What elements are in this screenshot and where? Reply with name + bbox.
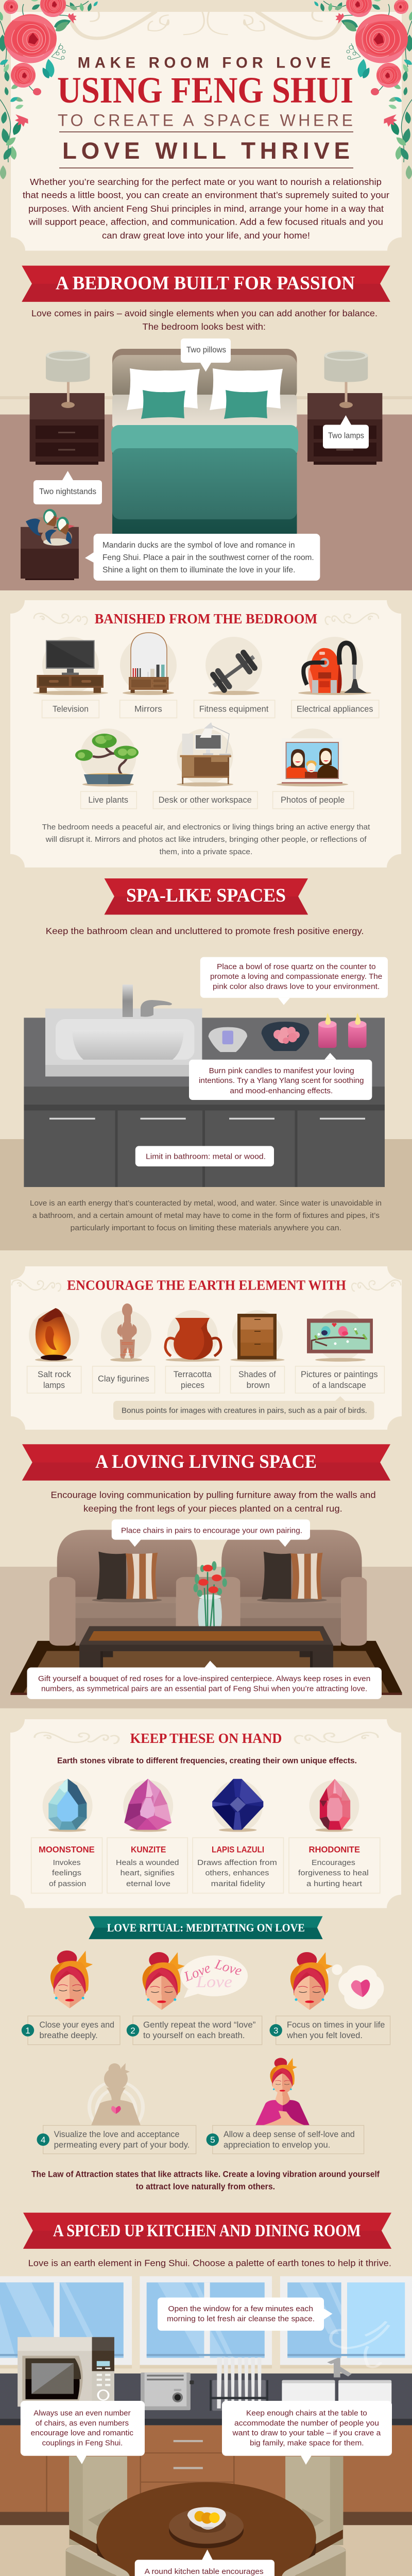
banner: a loving living space: A LOVING LIVING SPACE: [95, 1451, 317, 1472]
callout: enough chairs: Keep enough chairs at the table to: [246, 2409, 367, 2417]
card: lapis lazuli: Draws affection from: [197, 1858, 277, 1867]
step 5: 5: [210, 2135, 215, 2145]
icon: kunzite: [123, 1778, 173, 1832]
card: rhodonite: Encourages: [312, 1858, 355, 1867]
step 4: [37, 2125, 196, 2154]
callout: place chairs in pairs: [112, 1519, 310, 1547]
labels: row 1: [42, 700, 379, 718]
text: living intro: Encourage loving communication by pulling furniture away from the walls and: [50, 1490, 376, 1500]
icon: cushion left: [92, 1552, 162, 1602]
icon: moonstone: [43, 1778, 93, 1832]
illustration: kitchen and dining room: [0, 2276, 412, 2576]
text: living intro: keeping the front legs of your pieces planted on a central rug.: [83, 1503, 342, 1514]
icon: cushion right: [257, 1552, 327, 1602]
callout: two lamps: Two lamps: [328, 432, 364, 440]
icon: dining table: [96, 2482, 316, 2576]
text: kitchen intro: Love is an earth element in Feng Shui. Choose a palette of earth tones to help it thrive.: [28, 2258, 391, 2268]
callout: enough chairs: accommodate the number of people you: [234, 2419, 379, 2428]
labels: earth items: Terracotta: [174, 1370, 212, 1379]
card: lapis lazuli: [193, 1838, 283, 1893]
text: spa intro: Keep the bathroom clean and uncluttered to promote fresh positive energy.: [46, 926, 364, 936]
step 4: permeating every part of your body.: [54, 2140, 190, 2149]
callout: two nightstands: Two nightstands: [39, 487, 96, 496]
panel: encourage the earth element: [11, 1266, 402, 1430]
callout: two pillows: Two pillows: [186, 346, 226, 354]
title: TO CREATE A SPACE WHERE: [58, 111, 353, 130]
section: meditation steps: [22, 1951, 390, 2191]
callout: bonus points: Bonus points for images with creatures in pairs, such as a pair of birds.: [122, 1406, 367, 1415]
icon: lamp right: [324, 350, 368, 408]
text: script love: Love: [181, 1960, 213, 1985]
icon: front chair left: [66, 2545, 161, 2576]
callout: red roses: [27, 1661, 382, 1699]
callout: round table: A round kitchen table encourages: [145, 2568, 264, 2576]
title: MAKE ROOM FOR LOVE: [78, 55, 331, 72]
icon: desk: [177, 722, 233, 786]
text: earth energy: Love is an earth energy that’s counteracted by metal, wood, and water. Since water is unavoidable in: [30, 1199, 382, 1208]
text: banished explanation: them, into a private space.: [160, 848, 252, 856]
card: kunzite: eternal love: [126, 1879, 170, 1888]
icon: bowl of rose quartz: [262, 1022, 309, 1051]
callout: even number of chairs: [21, 2401, 145, 2464]
icon: mandarin ducks: [26, 509, 75, 546]
labels: row 1: Television: [53, 704, 89, 714]
step 5: appreciation to envelop you.: [224, 2140, 330, 2149]
icon: dish rack: [210, 2358, 268, 2411]
card: moonstone: of passion: [49, 1879, 86, 1888]
icon: rhodonite: [310, 1779, 359, 1832]
labels: row 2: [81, 791, 354, 809]
callout: even number of chairs: Always use an even number: [33, 2409, 131, 2417]
icon: back chairs: [69, 2456, 343, 2554]
panel: header: [11, 12, 402, 251]
icon: vacuum cleaner: [298, 637, 371, 695]
icon: rose garland right: [313, 0, 412, 179]
callout: even number of chairs: encourage love and romantic: [31, 2429, 133, 2437]
callout: mandarin ducks: [85, 534, 320, 581]
labels: earth items: lamps: [43, 1381, 65, 1390]
callout: round table: [135, 2549, 274, 2576]
text: banished explanation: [42, 823, 370, 856]
icon: woman head closed eyes: [50, 1951, 93, 2008]
text: script love: [181, 1956, 244, 1991]
callout: mandarin ducks: Feng Shui. Place a pair in the southwest corner of the room.: [102, 553, 314, 562]
panel: banished from the bedroom: [10, 600, 401, 868]
callout: two nightstands: [33, 471, 102, 504]
callout: mandarin ducks: Shine a light on them to illuminate the love in your life.: [102, 566, 296, 574]
text: law of attraction: The Law of Attraction states that like attracts like. Create a loving vibration around yourself: [31, 2170, 380, 2179]
illustration: bedroom: [0, 338, 412, 590]
title: USING FENG SHUI: [57, 70, 353, 111]
callout: open window: Open the window for a few minutes each: [168, 2305, 313, 2313]
text: script love: Love: [213, 1956, 244, 1978]
step 2: Gently repeat the word “love”: [143, 2021, 255, 2030]
icon: front chair right: [250, 2545, 346, 2576]
icon: windows: [0, 2276, 412, 2368]
step 5: [207, 2125, 364, 2154]
icon: silhouette with heart: [87, 2063, 147, 2136]
card: rhodonite: RHODONITE: [309, 1844, 360, 1854]
callout: two lamps: [323, 415, 369, 448]
icon: soap dish: [209, 1027, 247, 1052]
intro text: Whether you’re searching for the perfect mate or you want to nourish a relationship: [30, 177, 382, 187]
card: lapis lazuli: others, enhances: [205, 1869, 269, 1877]
step 3: 3: [273, 2026, 278, 2036]
title: [57, 55, 353, 168]
step 4: 4: [41, 2135, 45, 2145]
step 3: when you felt loved.: [286, 2031, 363, 2040]
intro text: will support peace, affection, and communication. Add a few focused rituals and you: [28, 217, 383, 227]
icon: small nightstand: [21, 527, 79, 580]
callout: even number of chairs: of chairs, as even numbers: [36, 2419, 129, 2428]
labels: row 1: Fitness equipment: [199, 704, 269, 714]
text: banished explanation: will disrupt it. Mirrors and photos act like intruders, bringing other people, or reflections of: [45, 835, 367, 844]
icon: lamp left: [46, 350, 90, 408]
callout: pink candles: Burn pink candles to manifest your loving: [209, 1067, 354, 1075]
labels: row 2: Live plants: [88, 795, 128, 805]
callout: rose quartz: pink color also draws love to your environment.: [213, 983, 380, 991]
card: moonstone: Invokes: [53, 1858, 81, 1867]
icon: sink: [45, 985, 202, 1076]
icon: dumbbell: [205, 637, 262, 696]
heading: [35, 1730, 378, 1746]
labels: row 2: Photos of people: [281, 795, 345, 805]
callout: pink candles: intentions. Try a Ylang Ylang scent for soothing: [199, 1077, 364, 1085]
icon: bonsai: [75, 728, 139, 786]
card: rhodonite: [289, 1838, 380, 1893]
step 1: [22, 2016, 120, 2045]
icon: salt rock lamp: [29, 1308, 79, 1362]
heading: BANISHED FROM THE BEDROOM: [95, 611, 317, 626]
labels: earth items: of a landscape: [313, 1381, 366, 1390]
callout: red roses: Gift yourself a bouquet of red roses for a love-inspired centerpiece. Always keep roses in even: [38, 1675, 370, 1683]
labels: earth items: brown: [247, 1381, 270, 1390]
step 2: [127, 2016, 262, 2045]
callout: pink candles: [189, 1053, 372, 1100]
icon: landscape picture: [307, 1310, 373, 1362]
icon: woman hands on heart: [255, 2058, 310, 2125]
step 2: 2: [130, 2026, 135, 2036]
text: living intro: [50, 1490, 376, 1514]
callout: red roses: numbers, as symmetrical pairs are an essential part of Feng Shui when you’re attracting love.: [41, 1685, 367, 1693]
icon: woman with speech bubble: [143, 1952, 248, 2010]
icon: brown cabinet: [231, 1310, 284, 1362]
text: banished explanation: The bedroom needs a peaceful air, and electronics or living things bring an active energy that: [42, 823, 370, 832]
card: lapis lazuli: marital fidelity: [211, 1879, 265, 1888]
text: law of attraction: to attract love naturally from others.: [136, 2182, 275, 2191]
icon: clay figurine: [101, 1303, 151, 1362]
icon: nightstand right: [307, 393, 382, 465]
callout: two pillows: [181, 338, 231, 372]
step 4: Visualize the love and acceptance: [54, 2130, 179, 2139]
card: rhodonite: a hurting heart: [306, 1879, 363, 1888]
labels: row 2: Desk or other workspace: [159, 795, 252, 805]
card: kunzite: KUNZITE: [131, 1844, 166, 1854]
icon: breeze: [331, 2321, 389, 2367]
card: kunzite: heart, signifies: [121, 1869, 175, 1877]
icon: bed: [111, 349, 298, 534]
callout: limit metal or wood: Limit in bathroom: metal or wood.: [146, 1153, 266, 1161]
banner: spa-like spaces: SPA-LIKE SPACES: [126, 885, 286, 906]
card: rhodonite: forgiveness to heal: [298, 1869, 369, 1877]
step 1: 1: [25, 2026, 30, 2036]
icon: pink candles: [318, 1013, 367, 1048]
text: law of attraction: [31, 2170, 380, 2191]
banner: a bedroom built for passion: [22, 266, 390, 302]
callout: rose quartz: Place a bowl of rose quartz on the counter to: [217, 963, 376, 971]
banner: a spiced up kitchen and dining room: [23, 2213, 391, 2249]
callout: open window: morning to let fresh air cleanse the space.: [167, 2315, 315, 2323]
intro text: that needs a little boost, you can create an environment that’s supremely suited to your: [23, 190, 389, 200]
labels: row 1: Electrical appliances: [297, 704, 373, 714]
icon: rose garland left: [0, 0, 99, 179]
text: bedroom intro: [31, 308, 377, 332]
labels: earth items: Clay figurines: [98, 1375, 149, 1384]
icon: rug: [10, 1641, 402, 1695]
banner: a bedroom built for passion: A BEDROOM BUILT FOR PASSION: [56, 272, 355, 293]
card: lapis lazuli: LAPIS LAZULI: [212, 1844, 264, 1854]
callout: place chairs in pairs: Place chairs in pairs to encourage your own pairing.: [121, 1527, 302, 1535]
icon: terracotta vase: [165, 1310, 221, 1362]
card: moonstone: [31, 1838, 102, 1893]
text: earth stones: Earth stones vibrate to different frequencies, creating their own unique effects.: [57, 1757, 357, 1765]
banner: love ritual meditating: [89, 1916, 322, 1939]
callout: rose quartz: [200, 957, 388, 1005]
labels: earth items: Pictures or paintings: [301, 1370, 378, 1379]
icon: counter and cabinets: [24, 1018, 385, 1187]
icon: armchair left: [49, 1530, 197, 1646]
heading: KEEP THESE ON HAND: [130, 1730, 282, 1746]
intro text: [23, 177, 389, 241]
step 5: Allow a deep sense of self-love and: [224, 2130, 355, 2139]
heading: [34, 611, 379, 626]
illustration: bathroom: [0, 957, 412, 1250]
card: kunzite: Heals a wounded: [116, 1858, 179, 1867]
heading: ENCOURAGE THE EARTH ELEMENT WITH: [67, 1277, 346, 1293]
step 3: Focus on times in your life: [287, 2021, 385, 2030]
callout: limit metal or wood: [135, 1146, 274, 1166]
callout: enough chairs: big family, make space for them.: [250, 2439, 364, 2447]
step 3: [270, 2016, 390, 2045]
text: earth energy: [30, 1199, 382, 1232]
text: earth energy: a bathroom, and a certain amount of metal may have to come in the form of fixtures and pipes, it’s: [32, 1211, 380, 1220]
text: script love: Love: [196, 1972, 232, 1991]
banner: love ritual meditating: LOVE RITUAL: MEDITATING ON LOVE: [107, 1921, 305, 1934]
icon: toaster: [141, 2372, 194, 2410]
title: LOVE WILL THRIVE: [62, 138, 350, 164]
icon: rose bouquet in vase: [194, 1561, 227, 1636]
labels: earth items: Shades of: [238, 1370, 276, 1379]
icon: woman with thought bubble: [290, 1952, 384, 2010]
icon: armchair right: [176, 1530, 367, 1646]
text: bedroom intro: The bedroom looks best with:: [142, 321, 266, 332]
callout: enough chairs: want to draw to your table – if you crave a: [232, 2429, 381, 2437]
callout: bonus points: [113, 1396, 374, 1420]
icon: family photo: [277, 728, 348, 786]
callout: even number of chairs: couplings in Feng Shui.: [42, 2439, 123, 2447]
card: kunzite: [107, 1838, 187, 1893]
icon: nightstand left: [30, 393, 105, 465]
icon: kitchen sink: [282, 2358, 391, 2403]
panel: keep these on hand: [10, 1719, 401, 1908]
callout: open window: [158, 2298, 332, 2331]
step 1: breathe deeply.: [39, 2031, 98, 2040]
labels: earth items: pieces: [181, 1381, 204, 1390]
step 2: to yourself on each breath.: [143, 2031, 245, 2040]
labels: row 1: Mirrors: [134, 704, 162, 714]
callout: rose quartz: promote a loving and compassionate energy. The: [210, 973, 382, 981]
banner: a loving living space: [22, 1444, 390, 1481]
intro text: can draw great love into your life, and your home!: [102, 230, 310, 241]
card: moonstone: MOONSTONE: [39, 1844, 95, 1854]
labels: earth items: [27, 1366, 384, 1393]
text: earth energy: particularly important to focus on limiting these materials anywhere you can.: [71, 1224, 341, 1232]
banner: a spiced up kitchen and dining room: A SPICED UP KITCHEN AND DINING ROOM: [53, 2222, 360, 2241]
icon: coffee table: [79, 1626, 333, 1671]
card: moonstone: feelings: [52, 1869, 81, 1877]
icon: mirror: [120, 633, 177, 695]
text: bedroom intro: Love comes in pairs – avoid single elements when you can add another for balance.: [31, 308, 377, 318]
step 1: Close your eyes and: [39, 2021, 114, 2030]
callout: mandarin ducks: Mandarin ducks are the symbol of love and romance in: [102, 541, 295, 550]
icon: lapis lazuli: [212, 1779, 263, 1832]
callout: enough chairs: [222, 2401, 392, 2465]
illustration: living room: [0, 1519, 412, 1708]
icon: television: [33, 637, 108, 695]
labels: earth items: Salt rock: [38, 1370, 72, 1379]
banner: spa-like spaces: [105, 878, 308, 914]
intro text: purposes. With ancient Feng Shui principles in mind, arrange your home in a way that: [28, 204, 384, 214]
callout: pink candles: and mood-enhancing effects.: [230, 1087, 333, 1095]
icon: microwave: [18, 2337, 114, 2406]
